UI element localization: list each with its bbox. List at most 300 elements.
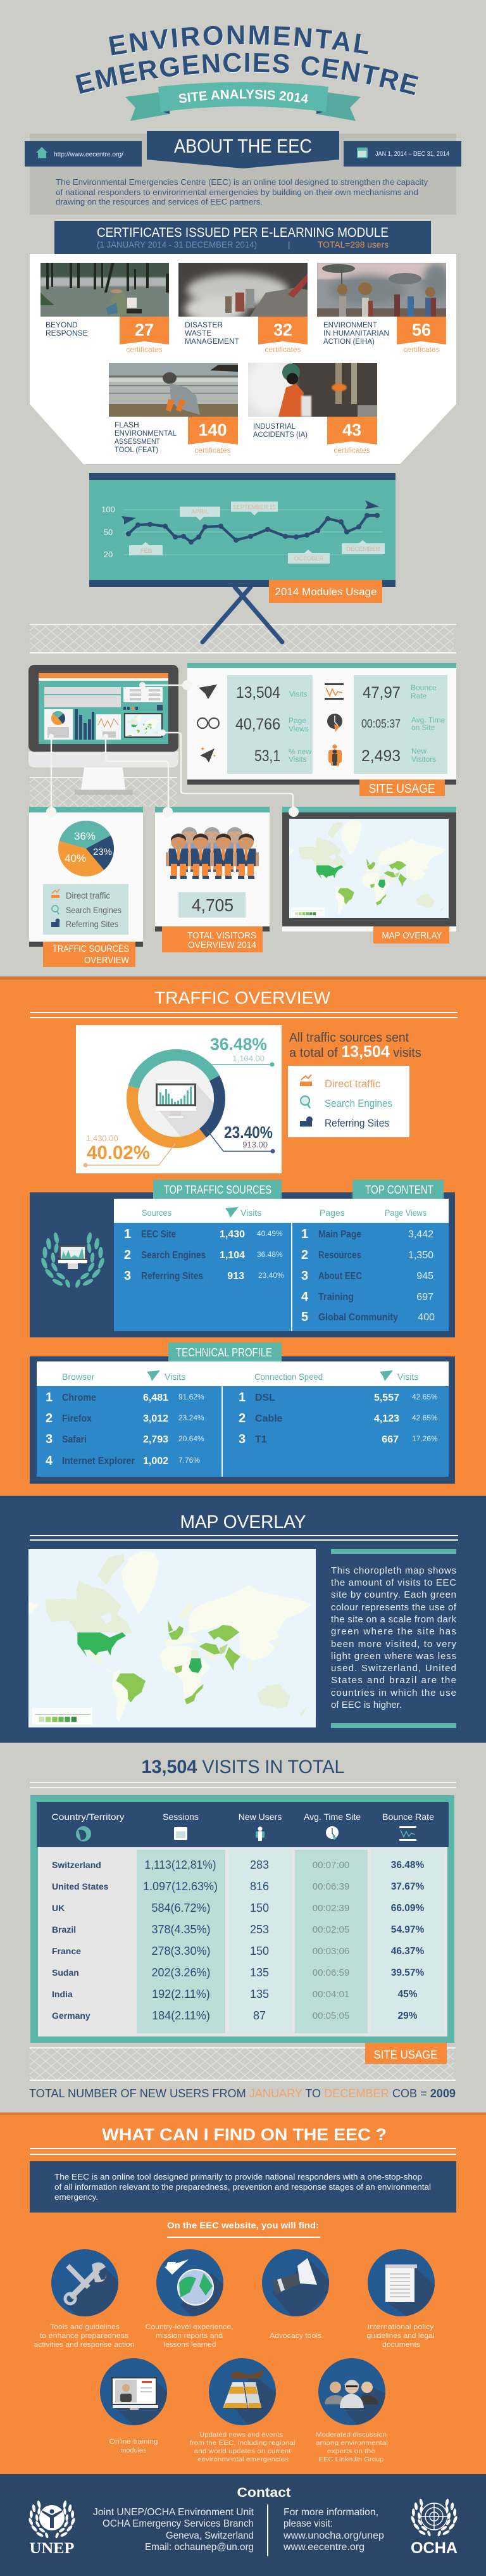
table: connection speed: 5,557 bbox=[374, 1392, 399, 1403]
caption: updated news: environmental emergencies bbox=[197, 2456, 289, 2463]
map description: green where the site has bbox=[331, 1626, 456, 1637]
certificates header: CERTIFICATES ISSUED PER E-LEARNING MODULE bbox=[97, 225, 389, 240]
panel: donut chart bbox=[76, 1025, 282, 1173]
caption: tools and guidelines: to enhance preparedness bbox=[40, 2332, 129, 2340]
callout: search engines bbox=[203, 1035, 275, 1066]
label: site usage bbox=[365, 2043, 447, 2064]
visitor count: 4,705 bbox=[192, 895, 234, 915]
icon: tools bbox=[51, 2249, 118, 2316]
UNEP logo bbox=[28, 2500, 76, 2557]
callout: search engines: 36.48% bbox=[210, 1035, 267, 1054]
table header: sources and pages: Page Views bbox=[385, 1208, 427, 1218]
connector lines bbox=[46, 680, 299, 817]
table: top traffic sources: 36.48% bbox=[257, 1250, 283, 1259]
caption: updated news: and world updates on current bbox=[194, 2447, 291, 2455]
table: top content: 400 bbox=[418, 1312, 435, 1323]
legend: Referring Sites bbox=[66, 919, 118, 929]
heading: traffic overview: TRAFFIC OVERVIEW bbox=[154, 988, 331, 1007]
legend: Direct traffic bbox=[66, 890, 110, 900]
map description: This choropleth map shows bbox=[331, 1565, 456, 1576]
traffic summary text: a total of 13,504 visits bbox=[289, 1043, 421, 1061]
module: flash environmental assessment tool bbox=[115, 417, 238, 455]
title: ENVIRONMENTAL bbox=[109, 25, 369, 56]
callout: referring sites bbox=[206, 1123, 275, 1154]
map description: light green where was less bbox=[331, 1651, 456, 1662]
module: beyond response: RESPONSE bbox=[46, 329, 88, 338]
table: browsers: 7.76% bbox=[178, 1456, 200, 1465]
url box bbox=[25, 141, 142, 167]
module: environment in humanitarian action: IN HUMANITARIAN bbox=[323, 329, 389, 338]
table: browsers: 2 bbox=[46, 1411, 53, 1425]
callouts: DECEMBER bbox=[346, 546, 380, 553]
new users column: 150 bbox=[250, 1945, 269, 1957]
pie chart: 40% bbox=[65, 852, 86, 864]
country names: UK bbox=[52, 1903, 65, 1913]
caption: country-level experience bbox=[146, 2323, 233, 2349]
module: disaster waste management: certificates bbox=[265, 345, 301, 354]
table: visits by country bbox=[30, 1795, 454, 2064]
icon: clock bbox=[326, 1826, 339, 1840]
stat labels: Rate bbox=[411, 691, 427, 700]
table: top content bbox=[301, 1227, 435, 1324]
module: disaster waste management: WASTE bbox=[185, 329, 211, 338]
icon: new visits plane: ✦ bbox=[213, 754, 216, 759]
stat labels: Visits bbox=[289, 755, 306, 764]
callouts bbox=[129, 502, 385, 564]
table: browsers: 3 bbox=[46, 1432, 53, 1446]
module: beyond response: certificates bbox=[126, 345, 163, 354]
caption: country-level experience: Country-level experience, bbox=[146, 2323, 233, 2331]
heading: 13,504 visits in total: 13,504 VISITS IN TOTAL bbox=[142, 1757, 344, 1777]
about text: The Environmental Emergencies Centre (EEC) is an online tool designed to strengthen the capacity bbox=[56, 177, 428, 187]
callout: referring sites: 913.00 bbox=[242, 1140, 268, 1149]
label: traffic sources overview: OVERVIEW bbox=[84, 955, 130, 966]
sessions column: 584(6.72%) bbox=[151, 1902, 211, 1914]
traffic summary text: All traffic sources sent bbox=[289, 1031, 409, 1045]
certificates header bbox=[54, 221, 431, 254]
label: total visitors overview: OVERVIEW 2014 bbox=[188, 940, 256, 950]
module: flash environmental assessment tool: ENVIRONMENTAL bbox=[115, 429, 177, 438]
table: top traffic sources: EEC Site bbox=[141, 1229, 176, 1240]
callout: direct traffic: 1,430.00 bbox=[86, 1133, 118, 1143]
site usage label: SITE USAGE bbox=[368, 782, 435, 796]
table header: sources and pages: Visits bbox=[240, 1208, 261, 1218]
heading: map overlay: MAP OVERLAY bbox=[180, 1512, 306, 1532]
sessions column: 202(3.26%) bbox=[151, 1966, 211, 1979]
table: top content: 4 bbox=[301, 1290, 309, 1304]
sessions column: 1.097(12.63%) bbox=[143, 1880, 218, 1893]
section: what can I find on the EEC bbox=[0, 2112, 486, 2474]
caption: advocacy tools: Advocacy tools bbox=[270, 2332, 322, 2340]
intro box: of all information relevant to the preparedness, prevention and response stages of an environmental bbox=[54, 2183, 431, 2192]
bounce rate column: 36.48% bbox=[391, 1860, 424, 1871]
certificates header: (1 JANUARY 2014 - 31 DECEMBER 2014) bbox=[97, 239, 257, 249]
date box bbox=[344, 141, 461, 167]
caption: moderated discussion: Moderated discussion bbox=[316, 2431, 387, 2439]
caption: moderated discussion bbox=[316, 2431, 388, 2463]
module: industrial accidents: 43 bbox=[342, 420, 361, 439]
bounce rate column: 54.97% bbox=[391, 1924, 424, 1935]
about text: of national responders to environmental emergencies by building on their own mechanisms and bbox=[56, 187, 418, 197]
label: map overlay: MAP OVERLAY bbox=[382, 930, 442, 941]
label: traffic sources overview bbox=[43, 942, 135, 967]
map description: of EEC is higher. bbox=[331, 1700, 402, 1710]
module: beyond response: 27 bbox=[135, 320, 154, 339]
table: connection speed bbox=[239, 1391, 438, 1446]
country names: Germany bbox=[52, 2011, 90, 2021]
bounce rate column: 66.09% bbox=[391, 1903, 424, 1914]
module: flash environmental assessment tool: TOOL (FEAT) bbox=[115, 445, 158, 454]
stat labels: on Site bbox=[411, 723, 435, 732]
photo: environment in humanitarian action bbox=[317, 263, 451, 317]
table: top traffic sources: 40.49% bbox=[257, 1229, 283, 1238]
chart label: 2014 Modules Usage bbox=[275, 586, 377, 598]
table: top content: About EEC bbox=[318, 1271, 362, 1282]
contact address bbox=[93, 2507, 254, 2553]
stat labels: Visitors bbox=[411, 755, 436, 764]
caption: international policy: International policy bbox=[367, 2323, 434, 2331]
icon: megaphone bbox=[262, 2249, 329, 2316]
table: top traffic sources: 913 bbox=[227, 1271, 244, 1282]
lattice band 3 bbox=[30, 2047, 456, 2081]
table: connection speed: 1 bbox=[239, 1391, 246, 1405]
module: beyond response bbox=[46, 317, 169, 354]
label: site usage: SITE USAGE bbox=[373, 2049, 438, 2061]
caption: online training: modules bbox=[120, 2447, 147, 2454]
new users column: 253 bbox=[250, 1923, 269, 1936]
callout: direct traffic: 40.02% bbox=[87, 1142, 150, 1163]
caption: moderated discussion: EEC LinkedIn Group bbox=[319, 2456, 384, 2463]
table: connection speed: 3 bbox=[239, 1432, 246, 1446]
map description: the site on a scale from dark bbox=[331, 1614, 457, 1625]
caption: tools and guidelines bbox=[34, 2323, 134, 2349]
icon: new users bbox=[256, 1826, 265, 1841]
more information bbox=[283, 2507, 384, 2553]
tab: technical profile bbox=[168, 1342, 282, 1361]
table header: Bounce Rate bbox=[382, 1812, 434, 1822]
table: connection speed: Cable bbox=[255, 1413, 283, 1424]
module: beyond response: BEYOND bbox=[46, 320, 78, 329]
caption: international policy: documents bbox=[382, 2341, 421, 2349]
stat labels: Visits bbox=[289, 690, 307, 698]
module: disaster waste management: 32 bbox=[273, 320, 292, 339]
table: browsers: Internet Explorer bbox=[62, 1456, 135, 1467]
panel: about the EEC bbox=[25, 131, 461, 215]
tab: top content bbox=[352, 1180, 444, 1199]
line chart: 2014 modules usage bbox=[89, 473, 396, 603]
module: industrial accidents bbox=[253, 417, 377, 455]
module: flash environmental assessment tool: FLASH bbox=[115, 420, 139, 429]
sessions column: 378(4.35%) bbox=[151, 1923, 211, 1936]
average time column bbox=[313, 1860, 349, 2021]
callouts: APRIL bbox=[191, 508, 209, 515]
table: connection speed: 2 bbox=[239, 1411, 246, 1425]
table: top traffic sources: 2 bbox=[124, 1248, 131, 1262]
pie chart: 23% bbox=[93, 847, 112, 857]
table: top content: 697 bbox=[416, 1292, 433, 1303]
OCHA logo: OCHA bbox=[411, 2539, 458, 2557]
map description bbox=[331, 1549, 457, 1728]
table header: Country/Territory bbox=[52, 1812, 124, 1822]
table: top content: 1,350 bbox=[408, 1250, 433, 1261]
table: browsers: 6,481 bbox=[143, 1392, 168, 1403]
intro box: The EEC is an online tool designed primarily to provide national responders with a one-stop-shop bbox=[54, 2173, 422, 2181]
country names bbox=[52, 1860, 109, 2021]
callouts: FEB bbox=[140, 548, 152, 555]
caption: country-level experience: mission reports and bbox=[156, 2332, 223, 2340]
label: total visitors overview: TOTAL VISITORS bbox=[187, 930, 256, 941]
lattice band 1 bbox=[30, 624, 456, 653]
intro box: emergency. bbox=[54, 2193, 98, 2202]
icon: new visits plane: ✦ bbox=[200, 746, 205, 753]
table: top content: Resources bbox=[318, 1250, 361, 1261]
table: browsers: 4 bbox=[46, 1454, 53, 1468]
table header: browser and connection: Visits bbox=[397, 1372, 418, 1382]
icon: industrial towers bbox=[209, 2358, 276, 2425]
section: traffic overview bbox=[0, 976, 486, 1496]
table: browsers: 1 bbox=[46, 1391, 53, 1405]
contact address: Joint UNEP/OCHA Environment Unit bbox=[93, 2507, 254, 2518]
module: environment in humanitarian action: 56 bbox=[412, 320, 431, 339]
photo: beyond response bbox=[40, 263, 169, 317]
map description: been more visited, to very bbox=[331, 1639, 457, 1650]
module: flash environmental assessment tool: ASSESSMENT bbox=[115, 437, 161, 446]
sessions column: 278(3.30%) bbox=[151, 1945, 211, 1957]
caption: country-level experience: lessons learned bbox=[163, 2341, 216, 2349]
table: top traffic sources: Search Engines bbox=[141, 1250, 206, 1261]
new users column: 135 bbox=[250, 1988, 269, 2000]
module: environment in humanitarian action: certificates bbox=[403, 345, 440, 354]
traffic summary text bbox=[289, 1031, 421, 1061]
new users column: 135 bbox=[250, 1966, 269, 1979]
table: top traffic sources: 3 bbox=[124, 1269, 131, 1283]
table: browsers: 23.24% bbox=[178, 1413, 204, 1422]
heading: what can I find: WHAT CAN I FIND ON THE EEC ? bbox=[102, 2125, 387, 2144]
icon: bounce rate bbox=[399, 1826, 416, 1841]
table header: New Users bbox=[239, 1812, 282, 1822]
icon: document bbox=[368, 2249, 435, 2316]
more information: please visit: bbox=[284, 2518, 333, 2529]
caption: international policy: guidelines and legal bbox=[367, 2332, 434, 2340]
line chart: 2014 modules usage: 50 bbox=[104, 527, 113, 537]
icon: new visits plane bbox=[200, 746, 216, 762]
table: browsers: 91.62% bbox=[178, 1392, 204, 1401]
module: environment in humanitarian action: ACTION (EIHA) bbox=[323, 337, 375, 346]
new users column: 150 bbox=[250, 1902, 269, 1914]
caption: online training: Online training bbox=[109, 2438, 158, 2446]
visitor count bbox=[178, 892, 246, 918]
caption: updated news: Updated news and events bbox=[199, 2431, 283, 2439]
module: industrial accidents: certificates bbox=[333, 446, 370, 455]
stat labels: New bbox=[411, 747, 427, 755]
UNEP logo: UNEP bbox=[29, 2540, 75, 2557]
table: browsers: 20.64% bbox=[178, 1434, 204, 1443]
module: disaster waste management: DISASTER bbox=[185, 320, 223, 329]
average time column: 00:03:06 bbox=[313, 1946, 349, 1957]
chart stand bbox=[202, 587, 282, 642]
table: top traffic sources: 23.40% bbox=[258, 1271, 284, 1280]
contact address: Geneva, Switzerland bbox=[166, 2530, 254, 2541]
icon: glasses bbox=[197, 718, 219, 728]
caption: updated news: from the EEC, including regional bbox=[190, 2439, 295, 2447]
module: industrial accidents: ACCIDENTS (IA) bbox=[253, 430, 308, 439]
table: connection speed: 42.65% bbox=[412, 1392, 438, 1401]
photo: disaster waste management bbox=[178, 263, 308, 317]
table header bbox=[52, 1812, 434, 1822]
heading: about the EEC: ABOUT THE EEC bbox=[174, 135, 312, 157]
average time column: 00:02:05 bbox=[313, 1924, 349, 1935]
table: top content: Global Community bbox=[318, 1312, 398, 1323]
ribbon: site analysis 2014 bbox=[125, 82, 361, 121]
panel: traffic sources overview bbox=[29, 807, 143, 967]
icon: clock bbox=[327, 714, 342, 732]
panel: map overlay thumbnail bbox=[282, 807, 456, 944]
section: map overlay bbox=[0, 1496, 486, 1743]
icon: laurel wreath with monitor bbox=[40, 1232, 106, 1289]
line chart: 2014 modules usage: 20 bbox=[104, 550, 113, 559]
bounce rate column: 29% bbox=[397, 2011, 418, 2021]
stat values: 00:05:37 bbox=[361, 717, 401, 730]
table: browsers: 2,793 bbox=[143, 1434, 168, 1445]
panel: site usage bbox=[187, 663, 456, 796]
table: top content: Main Page bbox=[318, 1229, 361, 1240]
ribbon: site analysis 2014: SITE ANALYSIS 2014 bbox=[178, 89, 308, 103]
average time column: 00:07:00 bbox=[313, 1860, 349, 1871]
contact address: OCHA Emergency Services Branch bbox=[103, 2518, 254, 2529]
title: EMERGENCIES CENTRE bbox=[76, 53, 419, 96]
lattice band 2 bbox=[30, 777, 177, 807]
bounce rate column: 39.57% bbox=[391, 1967, 424, 1978]
photo: flash environmental assessment tool bbox=[109, 363, 238, 417]
label: map overlay bbox=[373, 926, 449, 944]
caption: updated news bbox=[190, 2431, 295, 2463]
new users column bbox=[250, 1859, 269, 2022]
tab: top content: TOP CONTENT bbox=[365, 1184, 433, 1196]
average time column: 00:06:59 bbox=[313, 1967, 349, 1978]
map description: States and brazil are the bbox=[331, 1675, 456, 1686]
monitor icon bbox=[156, 1083, 196, 1118]
callout: search engines: 1,104.00 bbox=[232, 1054, 265, 1063]
heading: about the EEC bbox=[147, 131, 339, 168]
country names: Brazil bbox=[52, 1924, 76, 1935]
more information: www.eecentre.org bbox=[283, 2542, 364, 2553]
certificates header: | bbox=[288, 240, 290, 249]
chart label bbox=[269, 580, 382, 603]
stat values: 47,97 bbox=[363, 684, 401, 702]
pie chart: 36% bbox=[74, 830, 96, 842]
monitor illustration bbox=[28, 665, 178, 795]
table: top traffic sources: 1 bbox=[124, 1227, 131, 1241]
line chart: 2014 modules usage: 100 bbox=[101, 505, 115, 514]
stat labels bbox=[289, 683, 445, 764]
table: connection speed: 42.65% bbox=[412, 1413, 438, 1422]
icon: paper plane bbox=[199, 685, 217, 699]
bounce rate column: 37.67% bbox=[391, 1881, 424, 1892]
stat labels: Bounce bbox=[411, 683, 437, 692]
caption: moderated discussion: experts on the bbox=[327, 2447, 375, 2455]
caption: tools and guidelines: Tools and guidelines bbox=[50, 2323, 120, 2331]
stat labels: Page bbox=[289, 716, 306, 725]
choropleth world map bbox=[28, 1549, 316, 1727]
table: top content: Training bbox=[318, 1292, 354, 1303]
table: connection speed: 17.26% bbox=[412, 1434, 438, 1443]
icon: calendar bbox=[174, 1827, 187, 1840]
heading: contact: Contact bbox=[237, 2485, 291, 2500]
map description: colour represents the use of bbox=[331, 1602, 457, 1613]
table header: browser and connection bbox=[62, 1370, 418, 1382]
intro box bbox=[30, 2161, 456, 2213]
icon: experts group bbox=[318, 2358, 385, 2425]
table: browsers: Safari bbox=[62, 1434, 87, 1445]
tab: top traffic sources: TOP TRAFFIC SOURCES bbox=[164, 1184, 271, 1196]
date box: JAN 1, 2014 – DEC 31, 2014 bbox=[375, 150, 449, 158]
new users column: 283 bbox=[250, 1859, 269, 1871]
average time column: 00:02:39 bbox=[313, 1903, 349, 1914]
table header: Sessions bbox=[163, 1812, 199, 1822]
subheading: on the EEC website: On the EEC website, you will find: bbox=[167, 2220, 319, 2230]
table: top content: 3 bbox=[301, 1269, 308, 1283]
country names: Sudan bbox=[52, 1967, 79, 1978]
table: connection speed: 667 bbox=[382, 1434, 399, 1445]
people illustration bbox=[166, 827, 259, 879]
label: traffic sources overview: TRAFFIC SOURCES bbox=[53, 944, 129, 954]
new users column: 816 bbox=[250, 1880, 269, 1893]
table header: sources and pages: Pages bbox=[320, 1208, 345, 1218]
label: total visitors overview bbox=[162, 926, 263, 952]
stat labels: % new bbox=[289, 747, 311, 756]
icon: plane and globe bbox=[156, 2249, 223, 2316]
table: browsers: Chrome bbox=[62, 1392, 96, 1403]
panel: top traffic sources and content bbox=[30, 1180, 455, 1337]
module: environment in humanitarian action: ENVIRONMENT bbox=[323, 320, 378, 329]
country names: France bbox=[52, 1946, 81, 1956]
caption: tools and guidelines: activities and response action bbox=[34, 2341, 134, 2349]
tab: top traffic sources bbox=[153, 1180, 282, 1199]
panel: technical profile bbox=[30, 1342, 455, 1484]
stat values: 13,504 bbox=[236, 684, 280, 702]
total new users line: TOTAL NUMBER OF NEW USERS FROM JANUARY TO DECEMBER COB = 2009 bbox=[29, 2087, 456, 2100]
about text bbox=[56, 177, 428, 206]
country names: Switzerland bbox=[52, 1860, 101, 1870]
caption: online training bbox=[109, 2438, 158, 2454]
legend bbox=[43, 884, 128, 935]
page background: grey top section bbox=[0, 0, 486, 976]
more information: www.unocha.org/unep bbox=[283, 2530, 384, 2541]
traffic legend: Direct traffic bbox=[325, 1078, 380, 1090]
traffic legend: Referring Sites bbox=[325, 1117, 389, 1129]
table: top content: 2 bbox=[301, 1248, 308, 1262]
map description: used. Switzerland, United bbox=[331, 1663, 456, 1674]
bounce rate column: 46.37% bbox=[391, 1946, 424, 1957]
table: top content: 3,442 bbox=[408, 1229, 433, 1240]
OCHA logo bbox=[410, 2498, 458, 2557]
table: top traffic sources: 1,104 bbox=[220, 1250, 245, 1261]
country names: India bbox=[52, 1989, 73, 1999]
sessions column: 192(2.11%) bbox=[152, 1988, 210, 2000]
table: browsers: 1,002 bbox=[143, 1456, 168, 1467]
stat values: 40,766 bbox=[235, 716, 280, 733]
pie chart bbox=[58, 821, 114, 876]
stat values: 53,1 bbox=[254, 747, 280, 765]
sessions column: 1,113(12,81%) bbox=[144, 1859, 216, 1871]
module: flash environmental assessment tool: 140 bbox=[198, 420, 227, 439]
callouts: SEPTEMBER 15 bbox=[233, 504, 276, 510]
traffic legend: Search Engines bbox=[325, 1097, 392, 1109]
module: disaster waste management: MANAGEMENT bbox=[185, 337, 240, 346]
country names: United States bbox=[52, 1881, 109, 1891]
table: top content: 1 bbox=[301, 1227, 308, 1241]
module: flash environmental assessment tool: certificates bbox=[194, 446, 231, 455]
